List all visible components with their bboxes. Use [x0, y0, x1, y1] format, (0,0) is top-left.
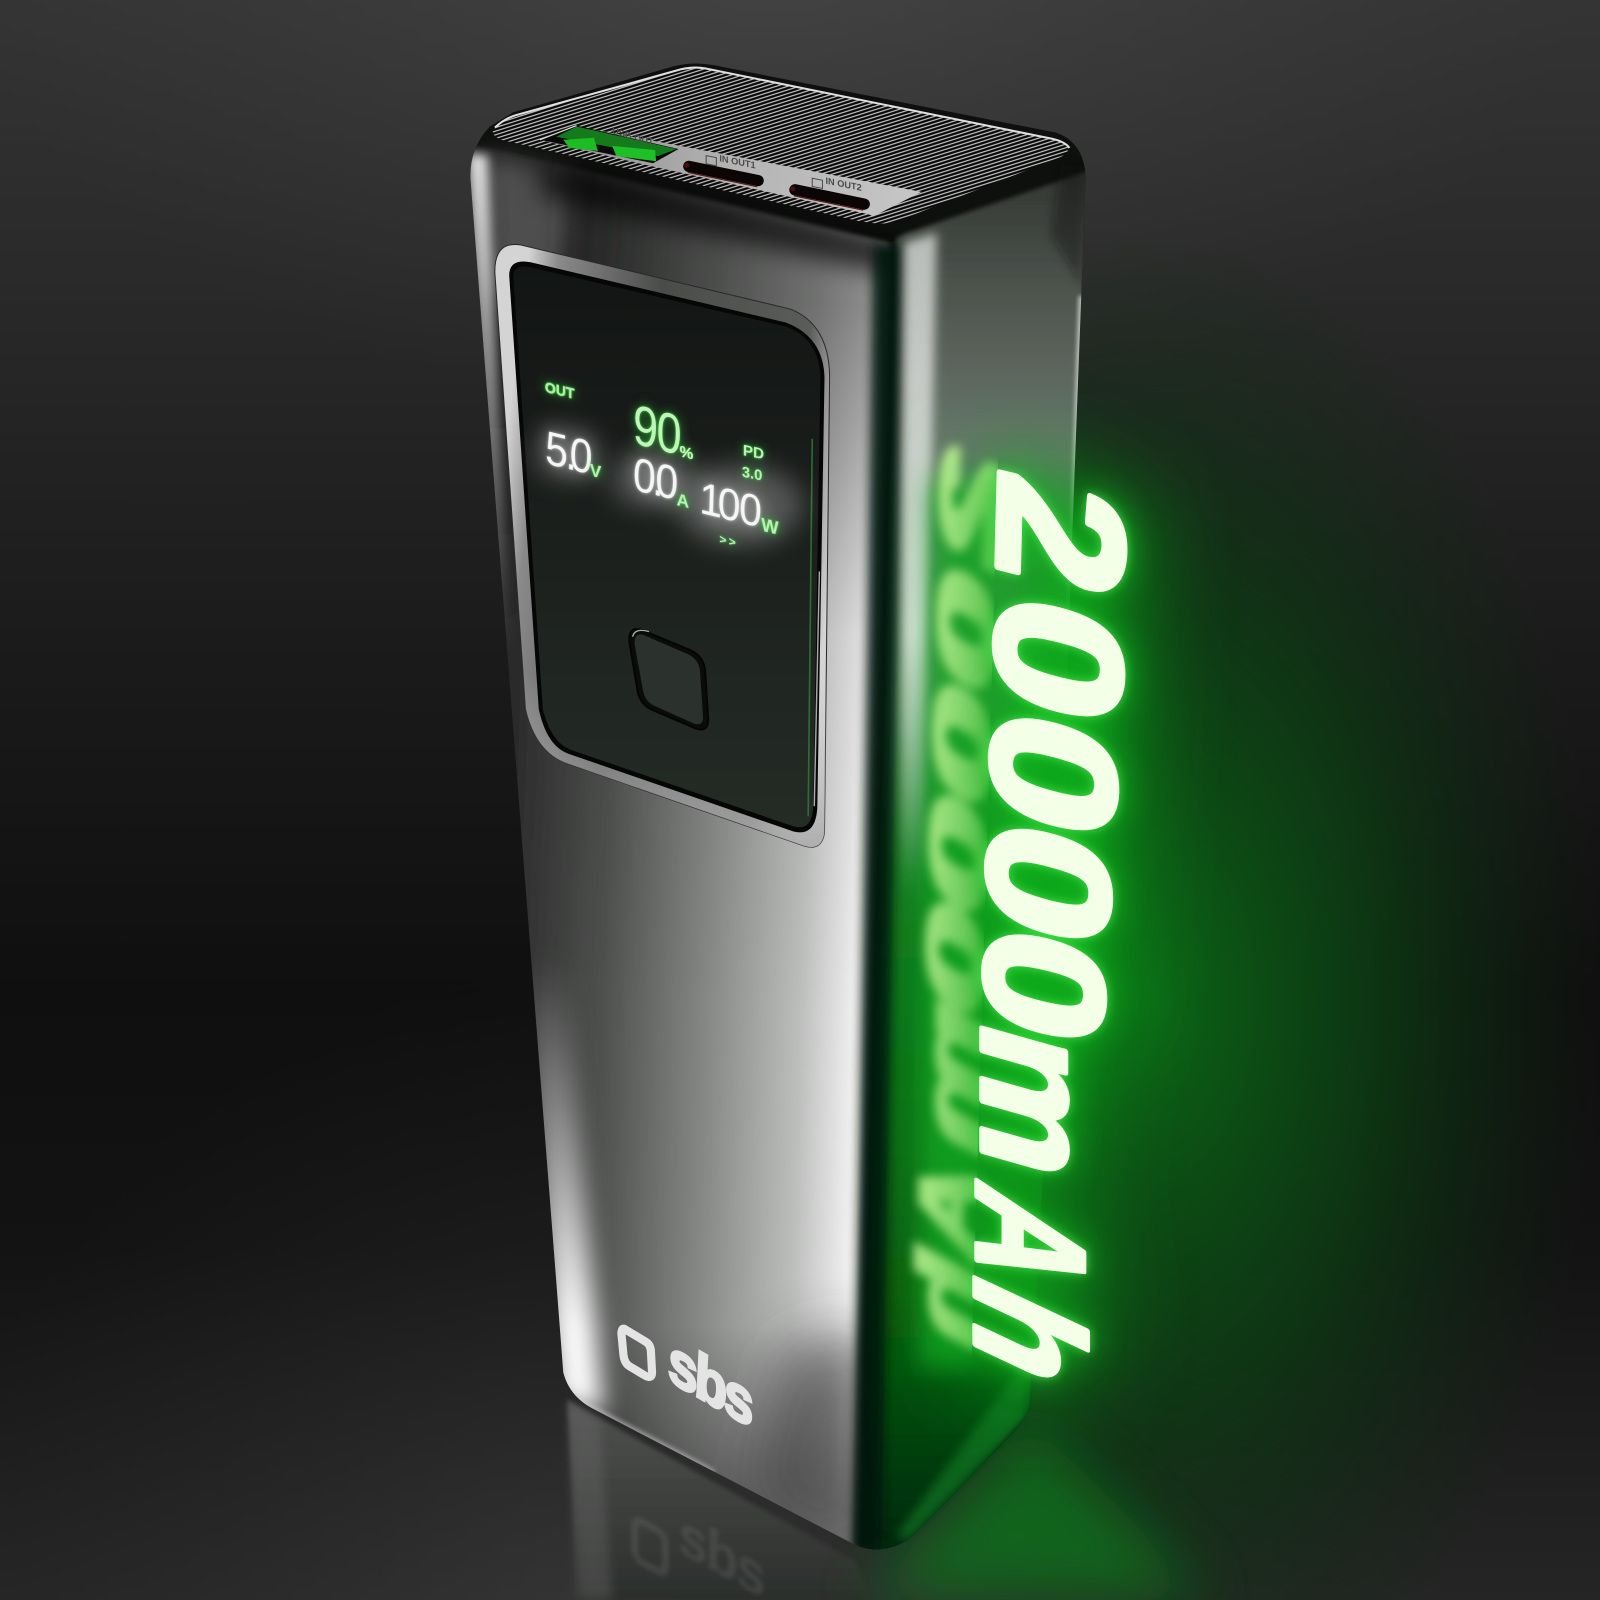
blurred reflection of capacity text: 0 — [914, 775, 1004, 932]
blurred reflection of capacity text: 0 — [911, 882, 1001, 1034]
touch button — [629, 629, 708, 730]
capacity heading: 20000mAh: h — [941, 1252, 1115, 1419]
power value: 100 — [699, 473, 763, 538]
PD 3.0 label: PD — [743, 442, 764, 463]
reflected sbs logo — [635, 1498, 765, 1600]
capacity heading: 20000mAh: A — [944, 1164, 1117, 1318]
metal port plate — [544, 127, 921, 216]
voltage value: V — [590, 460, 602, 482]
USB-C port 2 — [790, 186, 864, 210]
sbs logo: sbs — [667, 1324, 753, 1441]
capacity heading: 20000mAh: 0 — [949, 803, 1146, 964]
port labels — [612, 126, 862, 193]
battery percent value: 90 — [632, 392, 682, 467]
capacity heading: 20000mAh — [941, 456, 1162, 1419]
blurred reflection of capacity text: A — [905, 1140, 992, 1273]
capacity heading: 20000mAh: 0 — [948, 911, 1140, 1060]
display bezel — [495, 244, 830, 847]
port labels: USB OUT — [612, 126, 654, 147]
current value: A — [677, 489, 689, 512]
arrows: >> — [719, 532, 738, 550]
PD 3.0 label: 3.0 — [742, 464, 762, 485]
port labels: IN OUT2 — [826, 176, 862, 193]
floor reflection of the device — [567, 1400, 869, 1600]
front face — [464, 146, 898, 1561]
current value: 0.0 — [632, 448, 679, 511]
green halo behind reflected text on the side face — [918, 480, 1000, 1367]
power bank body — [464, 63, 1088, 1561]
green light on the floor — [867, 1420, 1204, 1600]
port labels: IN OUT1 — [719, 153, 756, 170]
blurred reflection of capacity text: m — [910, 979, 997, 1170]
USB-C port 1 — [684, 163, 758, 187]
blurred reflection of capacity text: 2 — [924, 428, 1014, 584]
blurred reflection of capacity text: h — [902, 1230, 990, 1362]
top face: ventilation grill — [492, 66, 1070, 224]
capacity heading: 20000mAh: 0 — [954, 692, 1155, 857]
blurred reflection of capacity text: 0 — [918, 664, 1008, 823]
capacity heading: 20000mAh: 2 — [958, 456, 1162, 615]
PD 3.0 label — [742, 442, 764, 485]
right face — [853, 163, 1088, 1561]
capacity heading: 20000mAh: m — [948, 1007, 1125, 1202]
battery percent value: % — [680, 443, 693, 463]
blurred reflection of capacity text: 0 — [922, 549, 1012, 710]
display glass — [513, 266, 820, 827]
voltage value: 5.0 — [545, 422, 593, 485]
capacity heading: 20000mAh: 0 — [957, 577, 1160, 742]
sbs logo — [621, 1324, 753, 1441]
power value: W — [761, 514, 779, 539]
OUT label: OUT — [545, 379, 574, 403]
USB port — [540, 126, 679, 163]
blurred reflection of capacity text — [906, 440, 998, 1354]
